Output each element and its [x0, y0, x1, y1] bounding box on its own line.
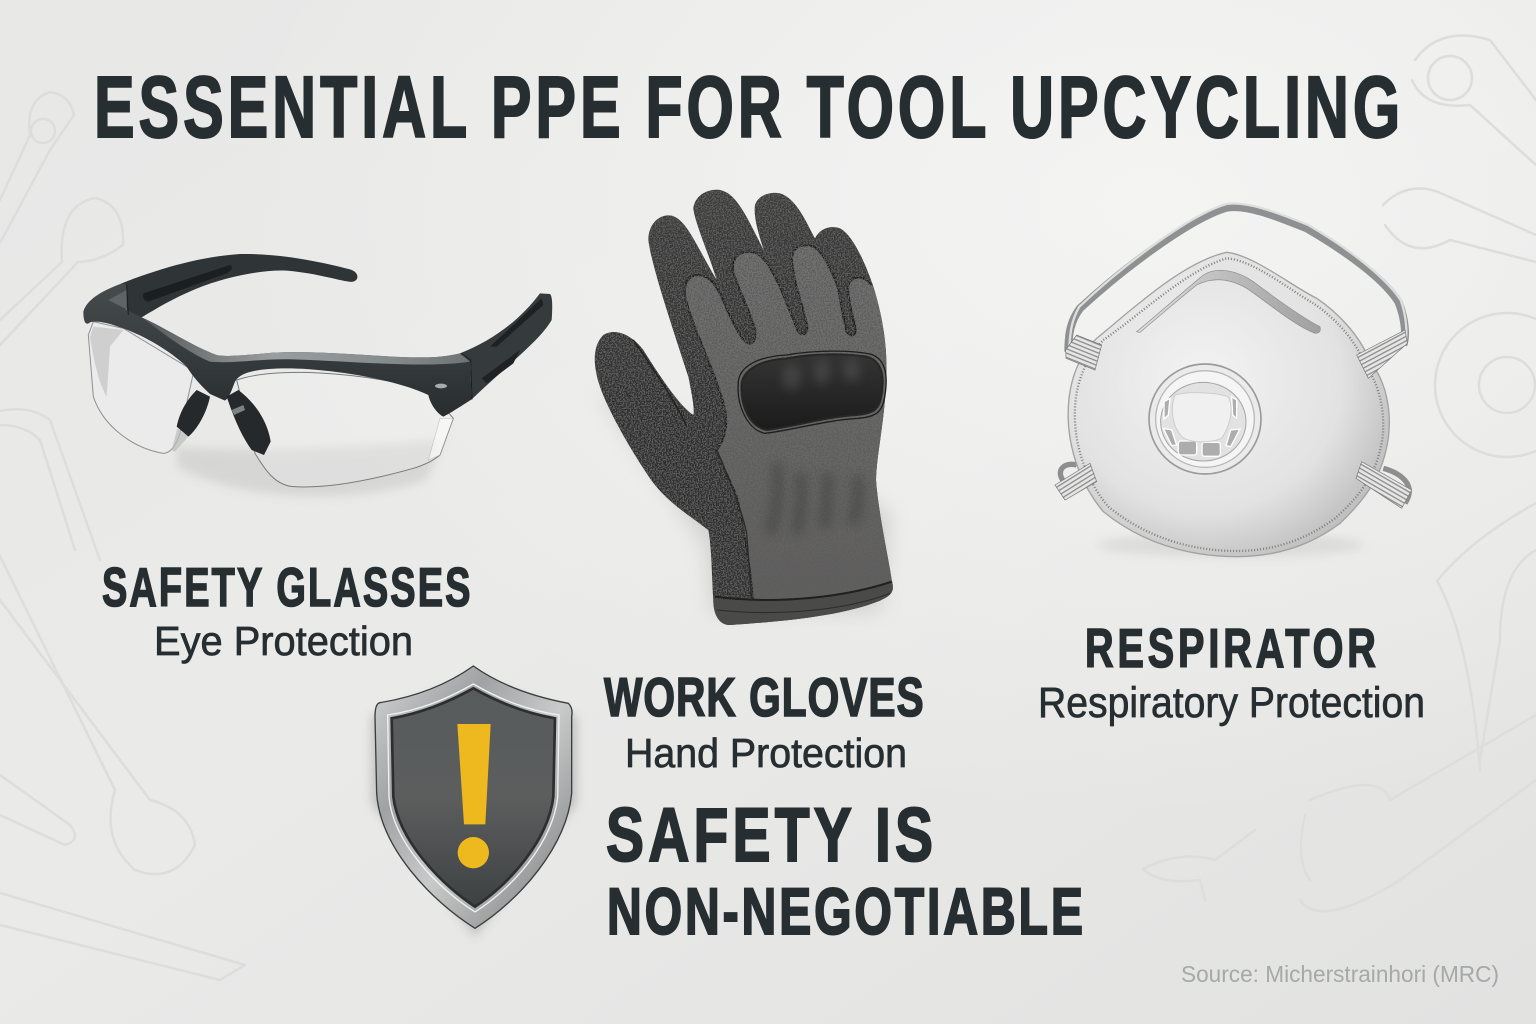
heading: work gloves: WORK GLOVES	[604, 667, 924, 729]
panel: work gloves	[595, 190, 924, 776]
panel: safety glasses	[83, 254, 552, 664]
heading: safety glasses: SAFETY GLASSES	[102, 557, 470, 619]
subheading: hand protection: Hand Protection	[625, 730, 907, 776]
heading: safety is: SAFETY IS	[606, 793, 933, 878]
panel: respirator	[1038, 203, 1425, 727]
callout: safety is non-negotiable	[372, 666, 1083, 949]
icon: safety glasses	[83, 254, 552, 496]
heading: respirator: RESPIRATOR	[1085, 619, 1376, 680]
heading: non-negotiable: NON-NEGOTIABLE	[607, 876, 1083, 949]
source note: Source: Micherstrainhori (MRC)	[1181, 961, 1499, 987]
icon: work glove	[595, 190, 897, 630]
subheading: respiratory protection: Respiratory Protection	[1038, 679, 1425, 727]
exclamation mark	[457, 724, 491, 868]
icon: respirator mask	[1055, 203, 1412, 557]
icon: warning shield	[372, 666, 577, 937]
title: ESSENTIAL PPE FOR TOOL UPCYCLING	[94, 58, 1400, 156]
subheading: eye protection: Eye Protection	[154, 618, 413, 664]
